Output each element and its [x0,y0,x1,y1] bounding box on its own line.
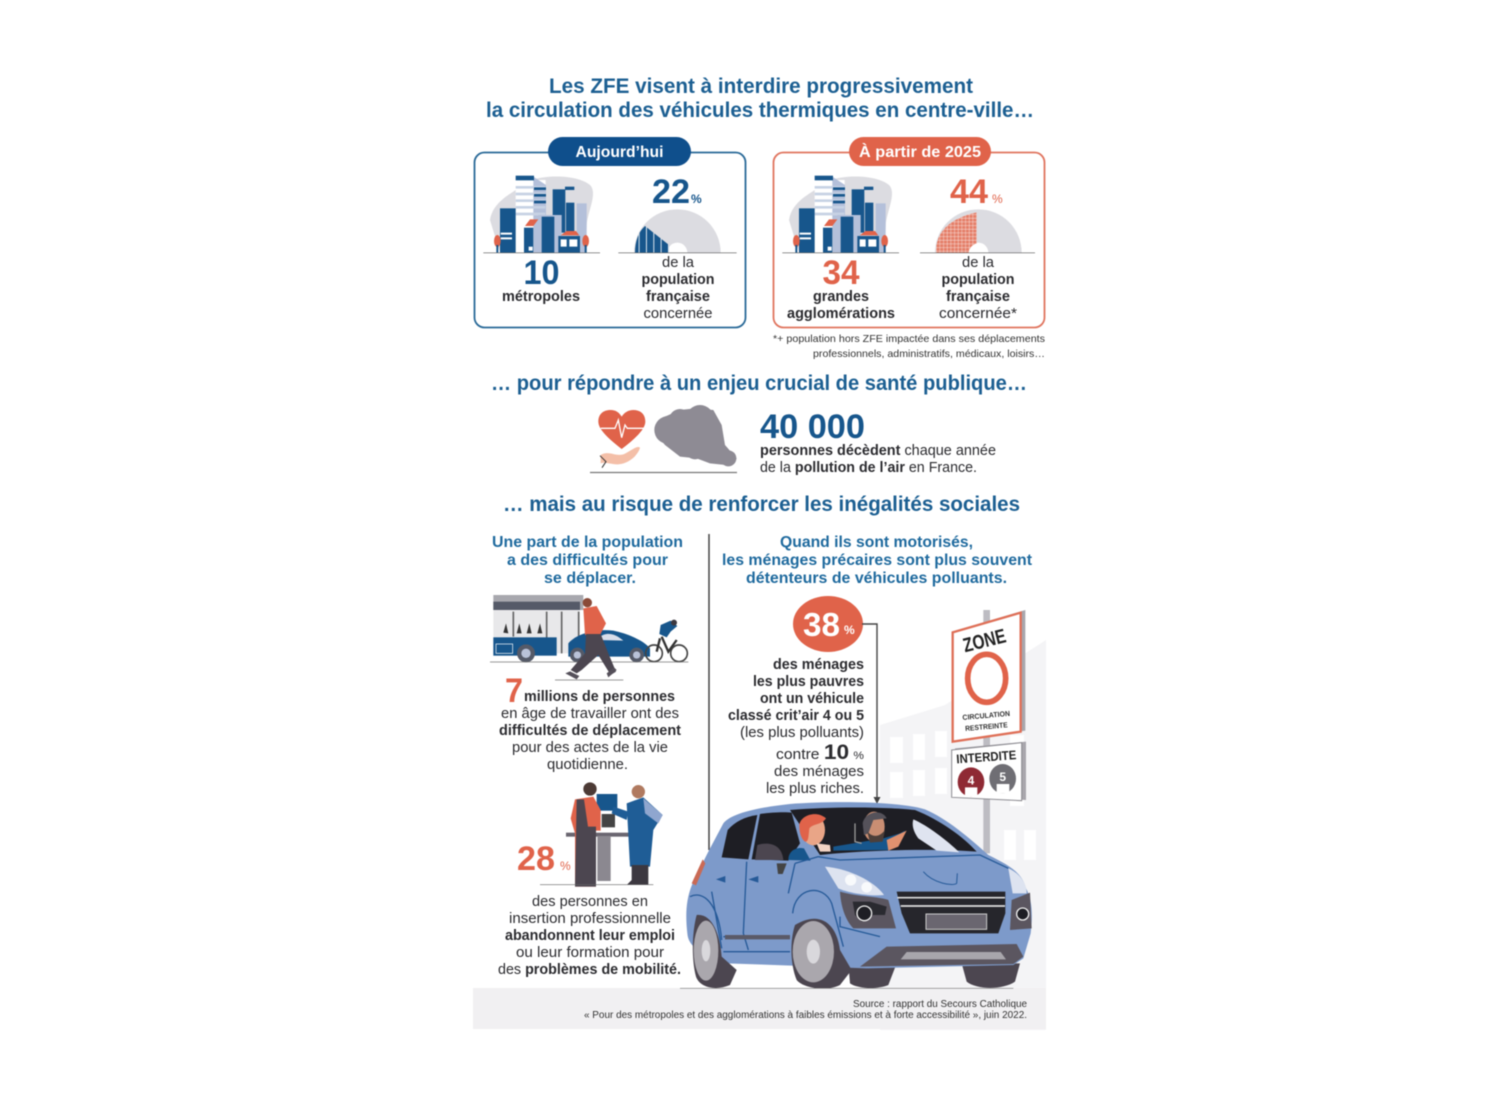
text: de la population concernée: de la [962,255,995,271]
pill: 2025: À partir de 2025 [859,142,981,161]
stat: 7 millions: quotidienne. [547,757,628,773]
stat: 10 métropoles: 10 [524,254,560,292]
lower bumper [860,944,1023,967]
text: insertion professionnelle: des personnes en [532,894,648,910]
source: Source : rapport du Secours Catholique [853,999,1027,1010]
subheading: right column: les ménages précaires sont plus souvent [722,552,1033,569]
bottom band [473,988,1046,1029]
text: de la population concernée [939,255,1017,322]
source [584,999,1027,1021]
man [833,812,907,851]
illustration: road sign [952,610,1026,853]
subheading: left column [492,534,683,587]
footnote [773,333,1045,360]
subheading: left column: a des difficultés pour [507,552,668,569]
footnote: professionnels, administratifs, médicaux, loisirs… [813,348,1045,360]
panel: aujourd'hui [474,137,746,328]
icon: city [483,176,600,253]
windshield [790,807,977,855]
tyres far side [848,963,1020,988]
sign: interdite: 5 [999,770,1006,784]
source: « Pour des métropoles et des agglomérations à faibles émissions et à forte accessibilité », juin 2022. [584,1010,1027,1021]
stat: 40 000 [760,408,996,476]
wheels [693,915,737,988]
callout: 38 % [793,596,863,652]
pill: aujourd'hui [548,137,691,166]
sign: zone: CIRCULATION [962,709,1010,722]
subheading: left column: Une part de la population [492,534,683,551]
text: ménages: contre 10 % [776,741,864,764]
subheading: right column [722,534,1033,587]
subheading: left column: se déplacer. [544,570,636,587]
stat: 34 grandes agglomérations [787,254,895,322]
stat: 34 grandes agglomérations: agglomérations [787,306,895,322]
stat: 34 grandes agglomérations: grandes [813,289,869,305]
heading: santé publique: … pour répondre à un enjeu crucial de santé publique… [491,372,1027,395]
text: insertion professionnelle: ou leur formation pour [516,945,664,961]
stat: 7 millions: pour des actes de la vie [512,740,668,756]
stat: 44 %: 44 [950,173,988,211]
illustration: transport [490,595,688,680]
stat: 34 grandes agglomérations: 34 [822,254,860,292]
stat: 22 %: % [691,192,702,206]
text: de la population: concernée [644,306,712,322]
callout: 38 %: 38 [803,606,840,643]
stat: 28 %: 28 [517,840,555,878]
column divider [708,534,710,850]
sign: interdite [952,742,1026,801]
stat: 28 %: % [560,859,571,873]
stat: 10 métropoles [502,254,580,305]
text: insertion professionnelle: abandonnent leur emploi [505,928,675,944]
stat: 7 millions: 7 [505,672,523,710]
stat: 40 000: de la pollution de l’air en France. [760,460,977,476]
title: la circulation des véhicules thermiques en centre-ville… [486,99,1034,122]
icon: city [782,176,899,253]
pill: 2025 [849,137,991,166]
car body [686,802,1032,968]
callout: 38 %: % [844,623,855,637]
headlights [825,867,884,895]
grille [897,892,1005,933]
baseline under icons [590,472,737,474]
stat: 22 %: 22 [652,173,690,211]
illustration: two workers at a desk [540,782,663,887]
stat: 44 %: % [992,192,1003,206]
text: ménages: des ménages [773,657,864,673]
text: ménages: des ménages [774,764,864,780]
text: insertion professionnelle: des problèmes de mobilité. [498,962,681,978]
text: de la population concernée: française [946,289,1010,305]
text: de la population [642,255,714,322]
stat: 40 000: personnes décèdent chaque année [760,443,996,459]
text: de la population: de la [662,255,695,271]
stat: 7 millions: millions de personnes [524,689,675,705]
panel: à partir de 2025 [774,137,1044,328]
background buildings [880,640,1046,1030]
sign: zone: RESTREINTE [965,720,1008,733]
fog lights [840,892,896,928]
subheading: right column: Quand ils sont motorisés, [780,534,973,551]
text: ménages [728,657,864,797]
sign: zone: ZONE [961,625,1008,657]
text: de la population: population [642,272,714,288]
title [486,75,1034,122]
footnote: *+ population hors ZFE impactée dans ses déplacements [773,333,1045,345]
text: de la population concernée: population [942,272,1014,288]
subheading: right column: détenteurs de véhicules polluants. [746,570,1007,587]
stat: 7 millions: difficultés de déplacement [499,723,681,739]
text: insertion professionnelle: insertion professionnelle [509,911,671,927]
arrow: bracket to car [862,624,880,804]
icon: pollution cloud [654,405,737,466]
sign: interdite: INTERDITE [956,748,1017,766]
text: ménages: les plus pauvres [753,674,864,690]
chart: 44% half circle [920,209,1035,253]
stat: 10 métropoles: métropoles [502,289,580,305]
illustration: car [680,802,1032,989]
body lines [690,855,1008,952]
text: de la population concernée: concernée* [939,306,1017,322]
text: insertion professionnelle [498,894,681,978]
icon: heart and hand [598,410,647,468]
text: de la population: française [646,289,710,305]
stat: 40 000: 40 000 [760,408,865,446]
woman [788,814,831,861]
chart: 22% half circle [618,209,737,253]
heading: inégalités sociales: … mais au risque de renforcer les inégalités sociales [503,493,1020,516]
title: Les ZFE visent à interdire progressivement [549,75,973,98]
text: ménages: ont un véhicule [760,691,864,707]
text: ménages: les plus riches. [766,781,864,797]
stat: 7 millions: en âge de travailler ont des [501,706,679,722]
sign: interdite: 4 [968,773,975,787]
sign: zone [953,610,1025,742]
pill: aujourd'hui: Aujourd’hui [576,144,664,161]
text: ménages: (les plus polluants) [740,725,864,741]
text: ménages: classé crit’air 4 ou 5 [728,708,864,724]
stat: 7 millions [499,672,681,773]
side windows [722,815,757,859]
